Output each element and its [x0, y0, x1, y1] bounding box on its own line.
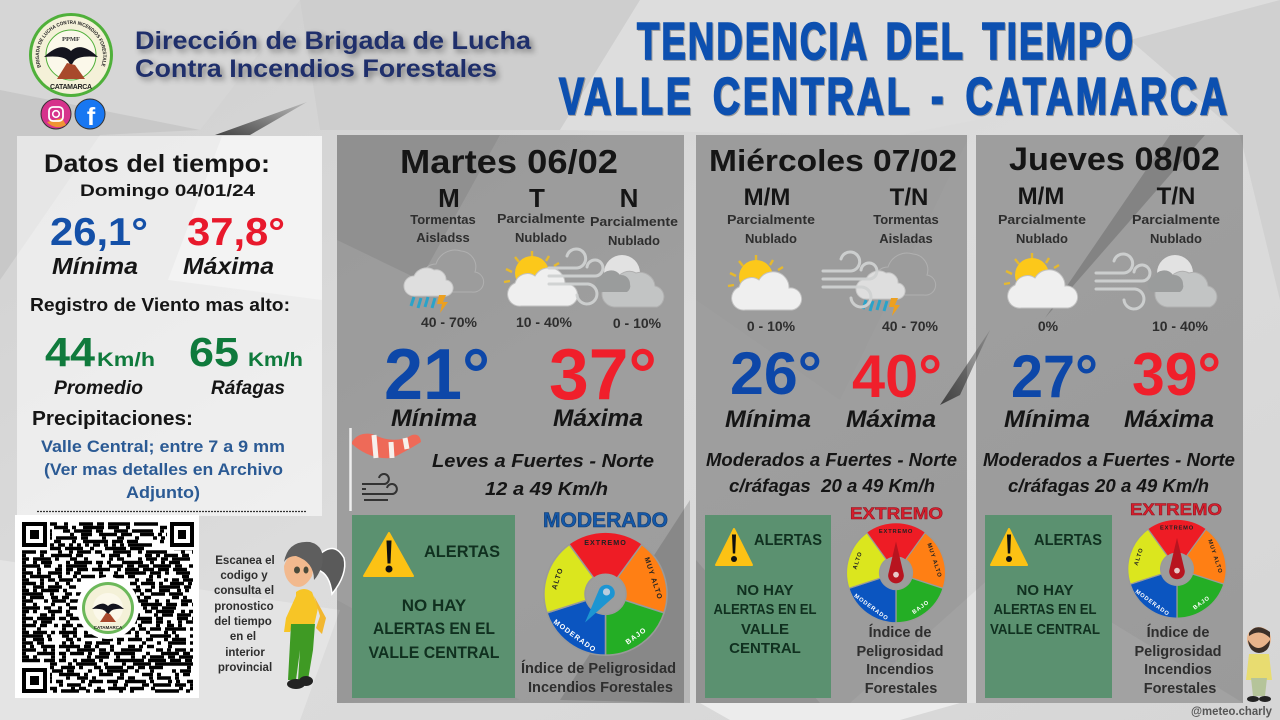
period labels [1018, 183, 1195, 210]
alert message: ALERTAS EN EL [714, 601, 816, 618]
gauge: moderado [544, 533, 667, 655]
gauge: extremo [1128, 520, 1226, 618]
icon: moon and cloud [1148, 255, 1217, 307]
forecast descriptions: Tormentas [873, 212, 939, 227]
rain chances: 0% [1038, 318, 1059, 334]
gauge caption: Índice de Peligrosidad [521, 660, 676, 677]
period labels: M [438, 183, 460, 213]
heading: dirección de brigada: Dirección de Brigada de Lucha [135, 27, 532, 55]
gauge caption [1134, 624, 1222, 697]
gauge caption [521, 660, 676, 696]
maximum temperature: 40° [852, 343, 942, 410]
qr caption: consulta el [214, 585, 274, 597]
period labels: T/N [1157, 183, 1195, 210]
panel: datos del tiempo background [17, 136, 322, 516]
maximum temperature: 37,8° [187, 211, 285, 254]
icon: wind [549, 249, 603, 304]
character: brigade woman [284, 542, 345, 689]
qr caption: en el [230, 631, 256, 643]
gauge caption [856, 624, 944, 697]
gauge: moderado: EXTREMO [584, 539, 627, 547]
heading: Jueves: Jueves 08/02 [1009, 141, 1220, 177]
qr code [15, 515, 199, 698]
gauge: moderado: MODERADO [552, 618, 598, 654]
forecast descriptions: Parcialmente [727, 212, 815, 227]
credit: @meteo.charly [1191, 706, 1273, 718]
icon: storm morning [404, 250, 484, 313]
period labels [438, 183, 638, 213]
alert message: VALLE CENTRAL [368, 643, 500, 662]
precipitation text: Valle Central; entre 7 a 9 mm [41, 437, 285, 456]
gauge: extremo [846, 523, 946, 623]
wind text: Leves a Fuertes - Norte [432, 451, 654, 471]
gauge caption: Incendios [866, 662, 934, 678]
wind text: c/ráfagas 20 a 49 Km/h [729, 476, 935, 496]
heading: Martes: Martes 06/02 [400, 143, 618, 180]
gauge: extremo: BAJO [912, 600, 931, 616]
forecast descriptions: Parcialmente [497, 211, 585, 226]
forecast descriptions [410, 211, 678, 248]
heading: dirección de brigada [135, 27, 532, 83]
rain chances [747, 318, 939, 334]
wind gusts [189, 329, 303, 375]
heading: Miércoles: Miércoles 07/02 [709, 143, 957, 178]
gauge: extremo: MUY ALTO [1206, 539, 1223, 575]
rain chances: 40 - 70% [882, 318, 939, 334]
label: máxima: Máxima [183, 253, 274, 279]
minimum temperature: 26,1° [50, 211, 148, 254]
gauge: extremo: MODERADO [1134, 589, 1170, 618]
icon: storm [856, 253, 936, 316]
forecast descriptions: Nublado [1150, 231, 1202, 246]
forecast descriptions: Parcialmente [590, 214, 678, 229]
icon: warning triangle [364, 533, 413, 576]
qr caption: provincial [218, 662, 272, 674]
label: mínima: Mínima [391, 405, 477, 432]
alert message [714, 582, 816, 657]
forecast descriptions: Nublado [745, 231, 797, 246]
period labels: M/M [744, 184, 790, 211]
label: ráfagas: Ráfagas [211, 378, 285, 399]
logo: brigada: CATAMARCA [50, 84, 92, 91]
title [559, 13, 1230, 126]
qr caption: interior [225, 647, 265, 659]
alert message [990, 582, 1100, 638]
maximum temperature: 39° [1132, 341, 1221, 408]
period labels [744, 184, 928, 211]
gauge: extremo: EXTREMO [879, 529, 913, 535]
gauge caption: Incendios Forestales [528, 680, 673, 696]
rain chances [1038, 318, 1209, 334]
label: máxima: Máxima [1124, 406, 1214, 433]
rain chances: 0 - 10% [613, 315, 662, 331]
forecast descriptions: Nublado [608, 233, 660, 248]
forecast descriptions: Parcialmente [998, 212, 1086, 227]
panel: alertas [705, 515, 831, 698]
qr caption: Escanea el [215, 555, 275, 567]
wind text: 12 a 49 Km/h [485, 479, 608, 499]
qr finder bottom-left [20, 665, 50, 695]
alert message [368, 596, 500, 662]
wind text: c/ráfagas 20 a 49 Km/h [1008, 476, 1209, 496]
date: Domingo 04/01/24 [80, 181, 256, 200]
gauge: extremo: EXTREMO [1160, 526, 1194, 532]
icon: sun and cloud [728, 255, 802, 310]
minimum temperature: 21° [384, 335, 490, 415]
qr finder top-left [20, 520, 50, 550]
gauge caption: Peligrosidad [856, 644, 944, 660]
wind gusts: Km/h [248, 350, 303, 371]
icon: facebook: f [87, 103, 96, 131]
heading: viento: Registro de Viento mas alto: [30, 295, 290, 315]
wind average: Km/h [97, 350, 155, 371]
gauge: extremo: ALTO [1134, 547, 1145, 566]
label: mínima: Mínima [52, 253, 138, 279]
icon: instagram [41, 99, 71, 129]
panel: Jueves [983, 141, 1235, 698]
heading: datos del tiempo: Datos del tiempo: [44, 150, 270, 178]
heading: precipitaciones: Precipitaciones: [32, 408, 193, 430]
period labels: N [620, 183, 638, 213]
icon: windsock [350, 428, 421, 511]
character: man with beard [1246, 627, 1272, 702]
label: mínima: Mínima [725, 406, 811, 433]
risk level label: MODERADO [543, 509, 668, 532]
rain chances: 10 - 40% [1152, 318, 1209, 334]
alert message: ALERTAS EN EL [373, 619, 495, 638]
alert heading: ALERTAS [1034, 532, 1102, 549]
logo: brigada: PPMF [62, 36, 80, 43]
forecast descriptions: Aisladss [416, 230, 470, 245]
alert message: CENTRAL [729, 640, 801, 657]
icon: sun and cloud afternoon [504, 251, 578, 306]
gauge caption: Incendios [1144, 662, 1212, 678]
forecast descriptions: Nublado [515, 230, 567, 245]
heading: dirección de brigada: Contra Incendios Forestales [135, 55, 497, 83]
qr center logo: CATAMARCA [94, 625, 123, 630]
alert message: VALLE CENTRAL [990, 621, 1100, 638]
gauge caption: Índice de [869, 624, 931, 641]
wind average: 44 [45, 329, 95, 375]
panel: Miércoles background [696, 135, 967, 703]
gauge caption: Forestales [1144, 681, 1216, 697]
period labels: M/M [1018, 183, 1064, 210]
gauge: extremo: ALTO [852, 551, 864, 570]
alert message: VALLE [741, 621, 789, 638]
forecast descriptions: Nublado [1016, 231, 1068, 246]
alert heading: ALERTAS [424, 542, 500, 561]
precipitation text: (Ver mas detalles en Archivo [44, 460, 283, 479]
rain chances: 40 - 70% [421, 314, 478, 330]
wind text [706, 450, 957, 496]
qr caption [214, 555, 275, 674]
forecast descriptions: Parcialmente [1132, 212, 1220, 227]
qr center logo [77, 577, 139, 639]
panel: Jueves background [976, 135, 1243, 703]
minimum temperature: 26° [730, 340, 822, 407]
forecast descriptions: Tormentas [410, 212, 476, 227]
panel: Miércoles [705, 143, 957, 698]
gauge: moderado: ALTO [550, 566, 565, 591]
rain chances: 0 - 10% [747, 318, 796, 334]
risk level label: EXTREMO [850, 504, 943, 523]
precipitation text [41, 437, 285, 502]
gauge: extremo: MODERADO [853, 593, 889, 622]
icon: sun and cloud [1004, 253, 1078, 308]
rain chances: 10 - 40% [516, 314, 573, 330]
wind text [983, 450, 1235, 496]
qr caption: del tiempo [214, 616, 272, 628]
logo: brigada [29, 13, 113, 97]
label: máxima: Máxima [846, 406, 936, 433]
label: mínima: Mínima [1004, 406, 1090, 433]
forecast descriptions: Aisladas [879, 231, 933, 246]
alert heading: ALERTAS [754, 532, 822, 549]
maximum temperature: 37° [549, 335, 657, 415]
icon: facebook [75, 99, 105, 131]
alert message: NO HAY [1017, 582, 1073, 599]
icon: warning triangle [716, 529, 752, 565]
qr caption: codigo y [220, 570, 268, 582]
precipitation text: Adjunto) [126, 483, 200, 502]
forecast descriptions [998, 212, 1220, 246]
icon: wind [823, 252, 877, 307]
qr finder top-right [167, 520, 197, 550]
panel: Martes background [337, 135, 684, 703]
wind text: Moderados a Fuertes - Norte [706, 450, 957, 470]
panel: Martes [350, 143, 678, 698]
logo: brigada: BRIGADA DE LUCHA CONTRA INCENDIOS FORESTALES [36, 20, 106, 68]
panel: alertas [985, 515, 1112, 698]
alert message: NO HAY [737, 582, 793, 599]
gauge: moderado: MUY ALTO [643, 556, 664, 601]
gauge: moderado: BAJO [624, 626, 648, 646]
forecast descriptions [727, 212, 939, 246]
wind average [45, 329, 155, 375]
panel: alertas [352, 515, 515, 698]
gauge: extremo: BAJO [1192, 595, 1211, 611]
alert message: NO HAY [402, 596, 467, 615]
qr caption: pronostico [214, 601, 274, 613]
panel: datos del tiempo [30, 150, 303, 502]
wind gusts: 65 [189, 329, 239, 375]
icon: warning triangle [991, 529, 1027, 565]
wind text [432, 451, 654, 499]
gauge caption: Peligrosidad [1134, 644, 1222, 660]
icon: wind [1096, 254, 1150, 309]
period labels: T/N [890, 184, 928, 211]
rain chances [421, 314, 662, 331]
alert message: ALERTAS EN EL [994, 601, 1096, 618]
gauge caption: Índice de [1147, 624, 1209, 641]
gauge caption: Forestales [865, 681, 937, 697]
period labels: T [529, 183, 545, 213]
gauge: extremo: MUY ALTO [925, 543, 942, 579]
wind text: Moderados a Fuertes - Norte [983, 450, 1235, 470]
risk level label: EXTREMO [1130, 500, 1222, 519]
label: promedio: Promedio [54, 378, 143, 399]
minimum temperature: 27° [1011, 343, 1098, 410]
label: máxima: Máxima [553, 405, 643, 432]
icon: moon and cloud night [595, 255, 664, 307]
